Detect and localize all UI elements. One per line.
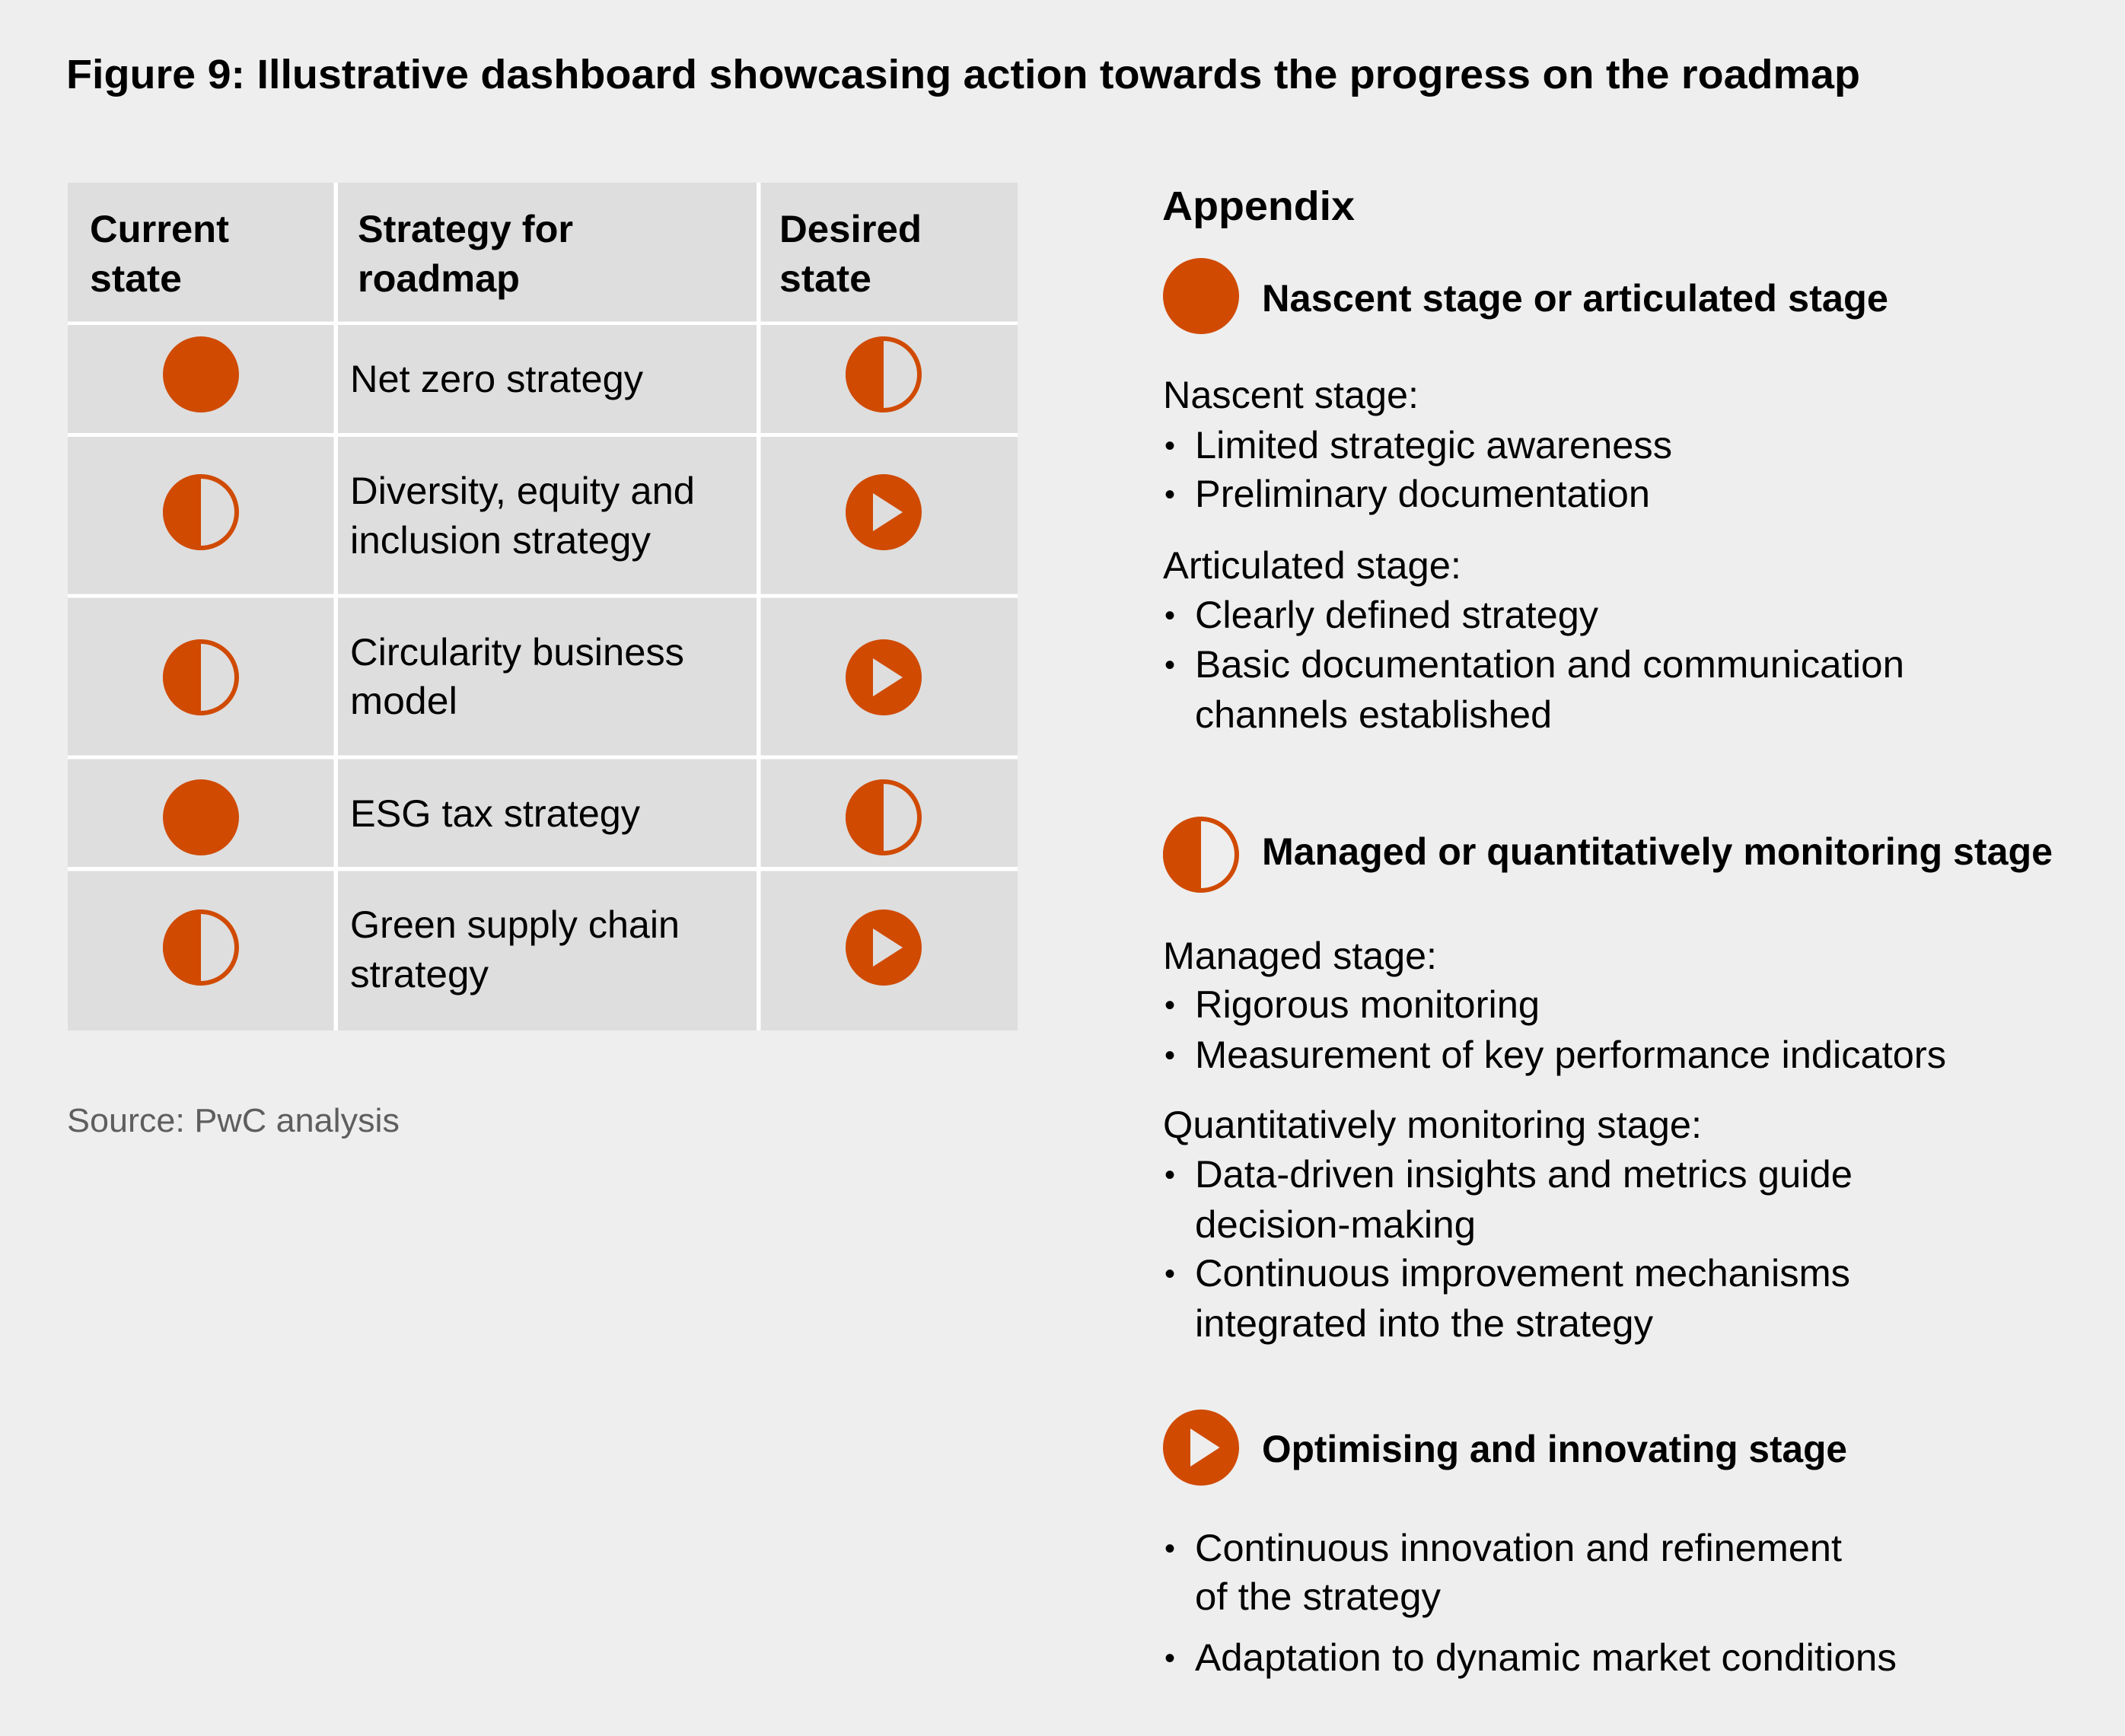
section: optimising and innovating stage: Continuous innovation and refinement <box>1195 1527 1842 1569</box>
section: nascent or articulated stage: Nascent stage: <box>1163 374 1419 416</box>
section: managed or quantitatively monitoring stage: • <box>1164 1158 1175 1192</box>
row: circularity business model: model <box>350 680 457 722</box>
section: nascent or articulated stage: Preliminary documentation <box>1195 473 1650 515</box>
section: nascent or articulated stage: Clearly defined strategy <box>1195 594 1598 636</box>
row: circularity business model: Circularity business <box>350 631 684 674</box>
row: net zero strategy <box>163 336 919 412</box>
section: nascent or articulated stage: • <box>1164 478 1175 511</box>
section: nascent or articulated stage: channels established <box>1195 693 1552 736</box>
section: managed or quantitatively monitoring stage: • <box>1164 989 1175 1022</box>
row: diversity, equity and inclusion strategy <box>163 470 922 562</box>
section: managed or quantitatively monitoring stage: Managed or quantitatively monitoring stage <box>1262 830 2053 873</box>
row: ESG tax strategy <box>163 779 919 855</box>
table header: roadmap <box>358 257 520 300</box>
section: optimising and innovating stage: Optimising and innovating stage <box>1262 1428 1847 1470</box>
section: nascent or articulated stage <box>1163 258 1904 736</box>
section: managed or quantitatively monitoring stage: Managed stage: <box>1163 935 1437 977</box>
section: managed or quantitatively monitoring stage: • <box>1164 1257 1175 1291</box>
row: green supply chain strategy: Green supply chain <box>350 903 680 946</box>
section: optimising and innovating stage <box>1163 1410 1897 1679</box>
section: managed or quantitatively monitoring stage: Continuous improvement mechanisms <box>1195 1252 1850 1295</box>
appendix heading: Appendix <box>1162 183 1355 229</box>
table header: Current <box>90 208 229 250</box>
section: optimising and innovating stage: • <box>1164 1642 1175 1675</box>
section: optimising and innovating stage: of the strategy <box>1195 1575 1441 1618</box>
table header: state <box>90 257 182 300</box>
table header: Strategy for <box>358 208 573 250</box>
section: managed or quantitatively monitoring stage: Measurement of key performance indicators <box>1195 1034 1946 1076</box>
title: Figure 9: Illustrative dashboard showcasing action towards the progress on the roadmap <box>66 52 1860 97</box>
section: nascent or articulated stage: • <box>1164 648 1175 682</box>
row: diversity, equity and inclusion strategy: inclusion strategy <box>350 519 651 562</box>
row: green supply chain strategy <box>163 903 922 995</box>
row: circularity business model <box>163 631 922 722</box>
table header: Desired <box>779 208 922 250</box>
row: green supply chain strategy: strategy <box>350 953 489 995</box>
table header <box>90 208 922 300</box>
source note: Source: PwC analysis <box>67 1102 400 1139</box>
section: nascent or articulated stage: Articulated stage: <box>1163 544 1461 587</box>
section: managed or quantitatively monitoring stage: integrated into the strategy <box>1195 1302 1653 1345</box>
section: managed or quantitatively monitoring stage <box>1163 817 2053 1345</box>
section: nascent or articulated stage: • <box>1164 429 1175 463</box>
section: nascent or articulated stage: Nascent stage or articulated stage <box>1262 277 1888 320</box>
section: managed or quantitatively monitoring stage: Quantitatively monitoring stage: <box>1163 1104 1702 1146</box>
row: diversity, equity and inclusion strategy: Diversity, equity and <box>350 470 695 512</box>
section: optimising and innovating stage: Adaptation to dynamic market conditions <box>1195 1636 1897 1679</box>
section: optimising and innovating stage: • <box>1164 1532 1175 1566</box>
row: net zero strategy: Net zero strategy <box>350 358 643 400</box>
panel: appendix <box>1162 183 2053 1679</box>
section: nascent or articulated stage: Basic documentation and communication <box>1195 643 1904 686</box>
section: managed or quantitatively monitoring stage: Data-driven insights and metrics guide <box>1195 1153 1853 1196</box>
section: managed or quantitatively monitoring stage: Rigorous monitoring <box>1195 983 1540 1026</box>
section: managed or quantitatively monitoring stage: decision-making <box>1195 1203 1476 1246</box>
section: nascent or articulated stage: Limited strategic awareness <box>1195 424 1672 467</box>
section: managed or quantitatively monitoring stage: • <box>1164 1039 1175 1072</box>
row: ESG tax strategy: ESG tax strategy <box>350 792 640 835</box>
panel: dashboard table <box>68 183 1018 1030</box>
section: nascent or articulated stage: • <box>1164 599 1175 632</box>
table header: state <box>779 257 871 300</box>
